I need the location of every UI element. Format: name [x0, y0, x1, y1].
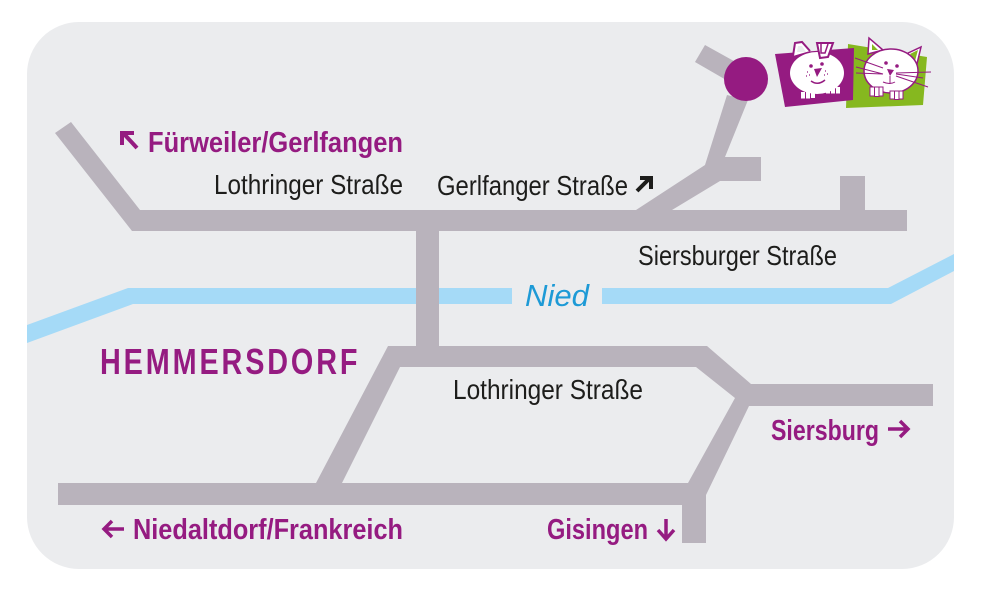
label: Nied: Nied: [525, 278, 591, 313]
label: Niedaltdorf/Frankreich: Niedaltdorf/Frankreich: [133, 514, 403, 546]
label: Lothringer Straße upper: Lothringer Straße: [214, 169, 403, 200]
icon: arrow up-left: [122, 133, 137, 148]
road network: [55, 45, 933, 543]
logo: two cats: [775, 38, 931, 108]
icon: arrow left: [104, 521, 124, 537]
label: HEMMERSDORF: HEMMERSDORF: [100, 341, 360, 382]
destination marker: [724, 57, 768, 101]
label: Gerlfanger Straße: Gerlfanger Straße: [437, 170, 628, 201]
logo: green square: [846, 44, 927, 108]
label: Fürweiler/Gerlfangen: Fürweiler/Gerlfangen: [148, 127, 403, 159]
icon: arrow right: [888, 421, 908, 437]
label: Siersburger Straße: Siersburger Straße: [638, 240, 837, 271]
label: Gisingen: Gisingen: [547, 514, 648, 546]
river: Nied: [27, 254, 954, 343]
label: Siersburg: Siersburg: [771, 415, 879, 447]
icon: arrow down: [658, 519, 674, 539]
icon: arrow up-right: [637, 178, 651, 191]
logo: left cat: [790, 42, 844, 98]
logo: right cat: [855, 38, 931, 100]
logo: purple square: [775, 48, 854, 107]
label: Lothringer Straße lower: Lothringer Straße: [453, 374, 643, 405]
